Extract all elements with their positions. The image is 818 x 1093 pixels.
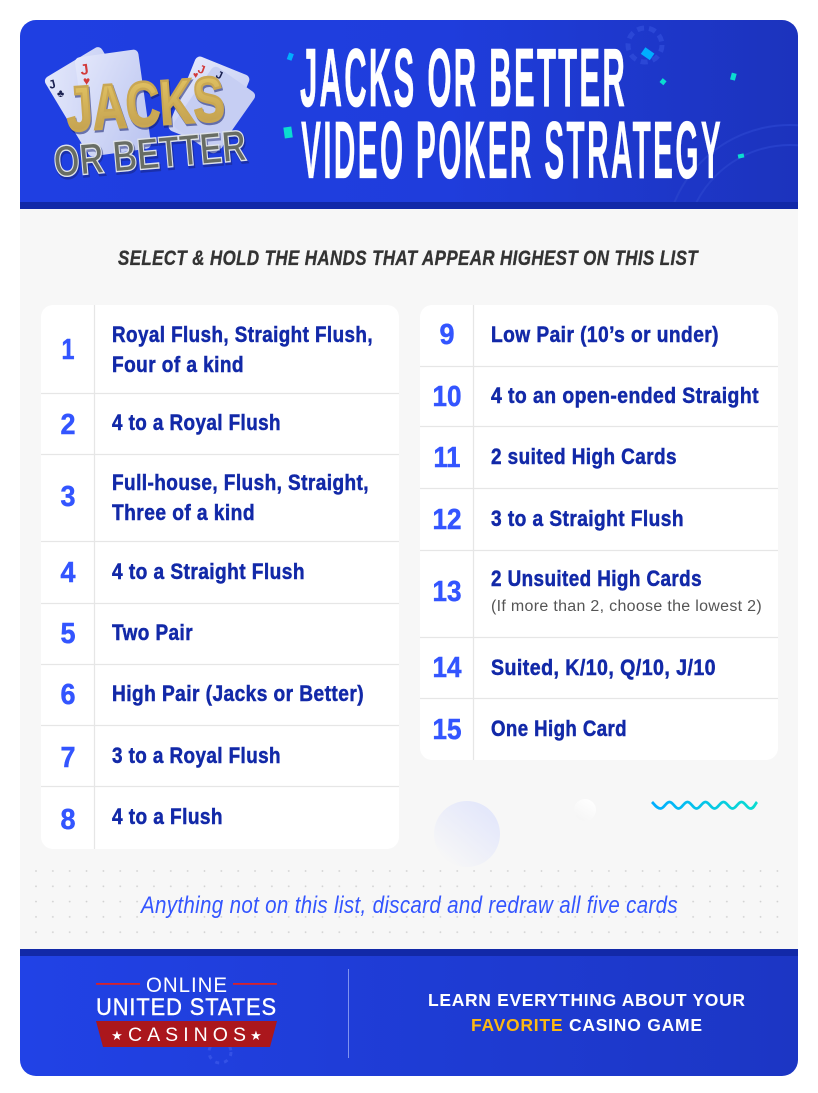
footer call to action: FAVORITE CASINO GAME bbox=[471, 1015, 702, 1035]
item 8 bbox=[61, 808, 222, 830]
icon: left playing cards: J bbox=[47, 77, 57, 92]
subheading: SELECT & HOLD THE HANDS THAT APPEAR HIGHEST ON THIS LIST bbox=[118, 247, 699, 270]
icon: right playing cards: J bbox=[214, 69, 224, 82]
item 6: High Pair (Jacks or Better) bbox=[112, 681, 364, 706]
item 3: 3 bbox=[60, 481, 76, 513]
item 7 bbox=[61, 746, 280, 768]
item 8: 8 bbox=[60, 804, 76, 836]
item 1: 1 bbox=[62, 334, 74, 366]
item 1: Royal Flush, Straight Flush, bbox=[112, 322, 373, 347]
icon: left playing cards: ♣ bbox=[57, 88, 64, 100]
logo word: or better bbox=[54, 130, 250, 180]
item 14: Suited, K/10, Q/10, J/10 bbox=[491, 655, 716, 680]
roulette wheel decoration bbox=[626, 26, 798, 202]
item 9: 9 bbox=[440, 319, 454, 351]
header banner bbox=[20, 20, 798, 209]
panel: right list bbox=[420, 305, 778, 760]
item 8: 4 to a Flush bbox=[112, 804, 223, 829]
item 11: 11 bbox=[434, 442, 460, 474]
item 10 bbox=[434, 386, 759, 408]
item 4 bbox=[60, 562, 304, 584]
item 5 bbox=[61, 622, 193, 644]
item 3: Full-house, Flush, Straight, bbox=[112, 470, 369, 495]
logo: jacks or better bbox=[43, 45, 257, 189]
item 2 bbox=[61, 414, 280, 435]
item 14: 14 bbox=[432, 652, 462, 684]
item 5: Two Pair bbox=[112, 620, 193, 645]
logo: online united states casinos: ★ bbox=[250, 1028, 262, 1043]
item 10: 4 to an open-ended Straight bbox=[491, 383, 759, 408]
decorative wave bbox=[652, 802, 757, 808]
item 6 bbox=[61, 684, 363, 706]
footer call to action: LEARN EVERYTHING ABOUT YOUR bbox=[428, 990, 745, 1010]
item 3 bbox=[60, 474, 368, 520]
icon: right playing cards: ♥ bbox=[193, 70, 198, 80]
logo: online united states casinos: CASINOS bbox=[128, 1024, 246, 1046]
item 4: 4 bbox=[60, 557, 76, 589]
item 3: Three of a kind bbox=[112, 500, 255, 525]
icon: left playing cards: ♥ bbox=[83, 74, 90, 88]
logo: online united states casinos bbox=[96, 974, 277, 1047]
item 10: 10 bbox=[432, 381, 462, 413]
item 12: 12 bbox=[432, 504, 462, 536]
item 15: 15 bbox=[432, 714, 462, 746]
confetti bbox=[283, 47, 744, 159]
item 11 bbox=[434, 446, 676, 469]
logo word: jacks: JACKS bbox=[64, 64, 227, 145]
decorative small circle bbox=[574, 799, 596, 821]
logo: online united states casinos: UNITED STATES bbox=[96, 994, 277, 1021]
item 15 bbox=[434, 718, 626, 741]
logo word: jacks: JACKS bbox=[65, 66, 228, 147]
item 13: 13 bbox=[432, 576, 462, 608]
logo: online united states casinos: ONLINE bbox=[146, 974, 228, 997]
item 11: 2 suited High Cards bbox=[491, 444, 677, 469]
icon: right playing cards: J bbox=[196, 62, 207, 77]
logo word: or better: OR BETTER bbox=[52, 121, 248, 187]
item 13: 2 Unsuited High Cards bbox=[491, 566, 702, 591]
item 9 bbox=[440, 324, 718, 347]
icon: left playing cards bbox=[43, 45, 152, 157]
logo word: or better: OR BETTER bbox=[53, 123, 249, 189]
icon: left playing cards: J bbox=[79, 61, 90, 79]
item 1: Four of a kind bbox=[112, 352, 244, 377]
item 12: 3 to a Straight Flush bbox=[491, 506, 684, 531]
item 13: (If more than 2, choose the lowest 2) bbox=[491, 598, 762, 615]
item 7: 3 to a Royal Flush bbox=[112, 743, 281, 768]
logo: online united states casinos: ★ bbox=[111, 1028, 123, 1043]
footer banner bbox=[20, 949, 798, 1076]
footer call to action bbox=[429, 994, 745, 1031]
item 4: 4 to a Straight Flush bbox=[112, 559, 305, 584]
item 7: 7 bbox=[60, 742, 76, 774]
panel: left list bbox=[41, 305, 399, 849]
item 2: 2 bbox=[60, 409, 76, 441]
closing note: Anything not on this list, discard and redraw all five cards bbox=[139, 892, 678, 919]
item 6: 6 bbox=[60, 679, 76, 711]
item 2: 4 to a Royal Flush bbox=[112, 410, 281, 435]
item 15: One High Card bbox=[491, 716, 627, 741]
item 14 bbox=[434, 656, 715, 680]
item 12 bbox=[434, 508, 683, 531]
item 1 bbox=[62, 326, 372, 372]
title bbox=[300, 48, 720, 180]
item 5: 5 bbox=[60, 618, 76, 650]
decorative large circle bbox=[438, 801, 500, 860]
icon: right playing cards bbox=[167, 55, 257, 155]
dot pattern bbox=[35, 870, 778, 933]
item 13 bbox=[432, 566, 762, 615]
logo word: jacks bbox=[66, 76, 226, 134]
item 9: Low Pair (10’s or under) bbox=[491, 322, 719, 347]
